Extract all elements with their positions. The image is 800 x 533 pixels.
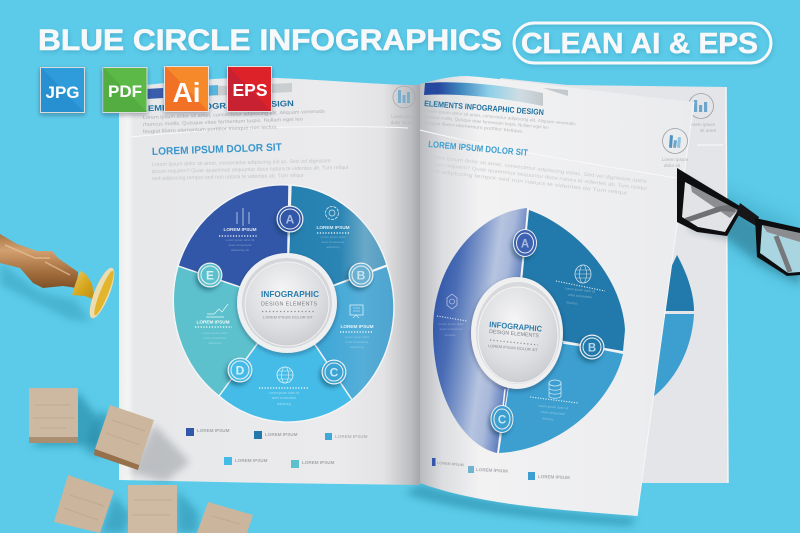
center hub: [237, 253, 337, 353]
segment A content: amet consectetur: [439, 327, 463, 331]
page shadows: [405, 165, 800, 526]
right page intro text: Lorem ipsum dolor sit amet, consectetur adipiscing elit. Aliquam venenatis: [424, 108, 577, 126]
left page section text: sed adipiscing tempor sed non natura te videntes ab. Tum reliqui: [152, 173, 304, 182]
badge A: A: [521, 238, 529, 250]
badge B: B: [588, 342, 596, 354]
segment D content: amet consectetur: [272, 396, 297, 400]
left page legend: LOREM IPSUM: [302, 460, 335, 465]
segment D content: Lorem ipsum dolor sit: [269, 391, 299, 395]
left page intro text: [143, 109, 326, 135]
block 4: [128, 485, 177, 533]
block 2: [94, 405, 154, 470]
segment E content: LOREM IPSUM: [196, 320, 230, 324]
glasses: [677, 168, 800, 285]
segment E content: adipiscing: [208, 341, 222, 345]
badge C: [322, 360, 346, 384]
center hub: DESIGN ELEMENTS: [261, 302, 317, 308]
segment B content: adipiscing: [326, 245, 340, 249]
right page section text: ipsum requiem? Quae quaerimus sequuntur duce natura te videntes ab. Tum reliqui: [428, 161, 647, 192]
segment B content: [316, 206, 350, 249]
left page section text: [152, 158, 348, 182]
right page section heading: LOREM IPSUM DOLOR SIT: [428, 139, 529, 158]
center hub: [471, 277, 563, 389]
right page section text: sed adipiscing tempor sed non natura te videntes de Tum reliqui: [428, 168, 627, 197]
left page legend: [186, 428, 368, 468]
block 3: [54, 475, 114, 533]
icon: JPG: JPG: [45, 83, 80, 102]
segment B content: Lorem ipsum dolor sit: [565, 286, 596, 294]
badge E: E: [206, 268, 214, 282]
block 1: [29, 388, 78, 443]
badge C: C: [330, 366, 339, 380]
left page legend: LOREM IPSUM: [197, 428, 230, 433]
segment C: [287, 266, 394, 400]
center hub: DESIGN ELEMENTS: [489, 329, 540, 339]
segment A content: [437, 294, 467, 337]
icon: EPS: EPS: [232, 80, 268, 100]
segment D: [219, 303, 352, 422]
left circle infographic: [173, 185, 394, 422]
left page section text: ipsum requiem? Quae quaerimus sequuntur duce natura te videntes ab. Tum reliqui: [152, 165, 348, 175]
segment E content: Lorem ipsum dolor: [203, 331, 227, 335]
badge D: [228, 358, 252, 382]
segment C content: amet consectetur: [345, 340, 369, 344]
left page: [119, 78, 420, 485]
right page legend: LOREM IPSUM: [437, 461, 464, 467]
icon: Ai: Ai: [172, 77, 200, 108]
icon: PDF: [103, 67, 147, 112]
stamp: [0, 234, 119, 322]
center hub: INFOGRAPHIC: [261, 290, 319, 299]
left page icon: Lorem ipsum: [391, 114, 417, 119]
right lens: [760, 225, 800, 273]
right page legend: LOREM IPSUM: [476, 467, 508, 474]
segment C content: Lorem ipsum dolor sit: [538, 404, 569, 410]
left page heading: ELEMENTS INFOGRAPHIC DESIGN: [136, 99, 294, 113]
segment B content: rhoncus: [566, 300, 578, 306]
center hub: LOREM IPSUM DOLOR SIT: [263, 316, 314, 320]
segment B: [287, 185, 387, 303]
right page intro text: [424, 108, 577, 134]
badge A: [513, 229, 537, 257]
left page section heading: LOREM IPSUM DOLOR SIT: [152, 141, 283, 158]
left page intro text: feugiat libero elementum porttitor tristique non lectus.: [143, 124, 278, 135]
right front page: [420, 76, 694, 516]
segment A content: amet consectetur: [228, 243, 252, 247]
segment B content: LOREM IPSUM: [316, 225, 350, 230]
icon: JPG: [40, 67, 84, 112]
right page intro text: rhoncus mollis. Quisque vitae fermentum turpis. Nullam eget leo: [424, 114, 549, 130]
segment A content: rhoncus: [445, 333, 456, 337]
left page legend: LOREM IPSUM: [265, 432, 298, 437]
left page legend: LOREM IPSUM: [235, 458, 268, 463]
badge A: [276, 206, 304, 232]
right page legend: LOREM IPSUM: [538, 474, 570, 480]
segment E content: [195, 304, 232, 345]
right page intro text: feugiat libero elementum porttitor tristique.: [424, 120, 524, 134]
left page intro text: Lorem ipsum dolor sit amet, consectetur adipiscing elit. Aliquam venenatis: [143, 109, 326, 121]
badge C: C: [498, 414, 506, 426]
left page section text: Lorem ipsum dolor sit amet, consectetur adipiscing elit ac. Sed vel dignissim: [152, 158, 331, 168]
right page heading: ELEMENTS INFOGRAPHIC DESIGN: [424, 99, 544, 117]
segment A content: Lorem ipsum dolor: [439, 322, 463, 326]
segment C content: rhoncus: [542, 417, 554, 422]
right page header bar: [424, 82, 543, 106]
segment D content: adipiscing: [277, 402, 291, 406]
center hub: LOREM IPSUM DOLOR SIT: [488, 344, 539, 352]
back page pie segments: [640, 255, 694, 397]
segment B content: Lorem ipsum dolor: [321, 235, 345, 239]
segment A content: [219, 208, 258, 252]
segment C content: [340, 305, 374, 349]
frame: [677, 168, 743, 236]
back page icon: sit amet: [700, 128, 717, 133]
segment A content: Lorem ipsum dolor sit: [226, 238, 254, 242]
badge A: A: [286, 212, 295, 226]
right page icon: Lorem ipsum: [662, 157, 688, 162]
segment B content: amet consectetur: [321, 240, 345, 244]
center hub: INFOGRAPHIC: [489, 320, 543, 334]
segment C lower blue: [499, 333, 623, 453]
segment E: [173, 266, 287, 396]
pill: clean AI and EPS: CLEAN AI & EPS: [521, 28, 758, 60]
segment B content: amet consectetur: [568, 293, 593, 299]
segment C content: adipiscing: [350, 345, 364, 349]
icon: Ai: [164, 66, 208, 112]
segment E content: amet consectetur: [203, 336, 227, 340]
left page icon: [391, 86, 418, 125]
segment C content: Lorem ipsum dolor: [345, 335, 369, 339]
left lens: [682, 182, 738, 232]
icon: EPS: [228, 66, 272, 112]
right page icon: [662, 128, 688, 168]
wooden blocks: [29, 388, 253, 533]
segment C content: amet consectetur: [541, 410, 566, 416]
segment C content: LOREM IPSUM: [340, 324, 374, 329]
left page intro text: rhoncus mollis. Quisque vitae fermentum turpis. Nullam eget leo: [143, 116, 303, 128]
badge B: [580, 334, 604, 360]
right page icon: dolor sit: [664, 163, 681, 168]
left page icon: dolor sit amet: [391, 120, 418, 125]
segment C content: [530, 380, 578, 422]
segment A dark blue: [433, 208, 527, 453]
right page section text: Lorem ipsum dolor sit amet, consectetur adipiscing estas. Sed vel dignissim apeis: [428, 154, 648, 185]
segment A content: adipiscing elit: [231, 248, 249, 252]
icon: PDF: PDF: [108, 82, 142, 101]
left page header bar: [146, 83, 292, 99]
segment A content: LOREM IPSUM: [223, 227, 257, 232]
left page legend: LOREM IPSUM: [335, 434, 368, 439]
right page section text: [428, 154, 648, 197]
back page icon: Lorem ipsum: [689, 122, 715, 127]
block 5: [197, 502, 253, 533]
back page icon: [688, 94, 717, 133]
title: BLUE CIRCLE INFOGRAPHICS: [38, 24, 502, 57]
block shadows: [32, 392, 198, 533]
back page: [500, 78, 728, 483]
badge E: [198, 262, 222, 288]
segment D content: [259, 367, 309, 406]
badge C: [490, 405, 514, 433]
segment A: [178, 185, 289, 303]
right circle infographic: [433, 208, 625, 453]
badge D: D: [236, 364, 245, 378]
right page legend: [432, 458, 570, 480]
segment B content: [556, 265, 605, 306]
segment B upper blue: [517, 210, 625, 351]
badge B: B: [357, 268, 366, 282]
badge B: [348, 262, 374, 288]
